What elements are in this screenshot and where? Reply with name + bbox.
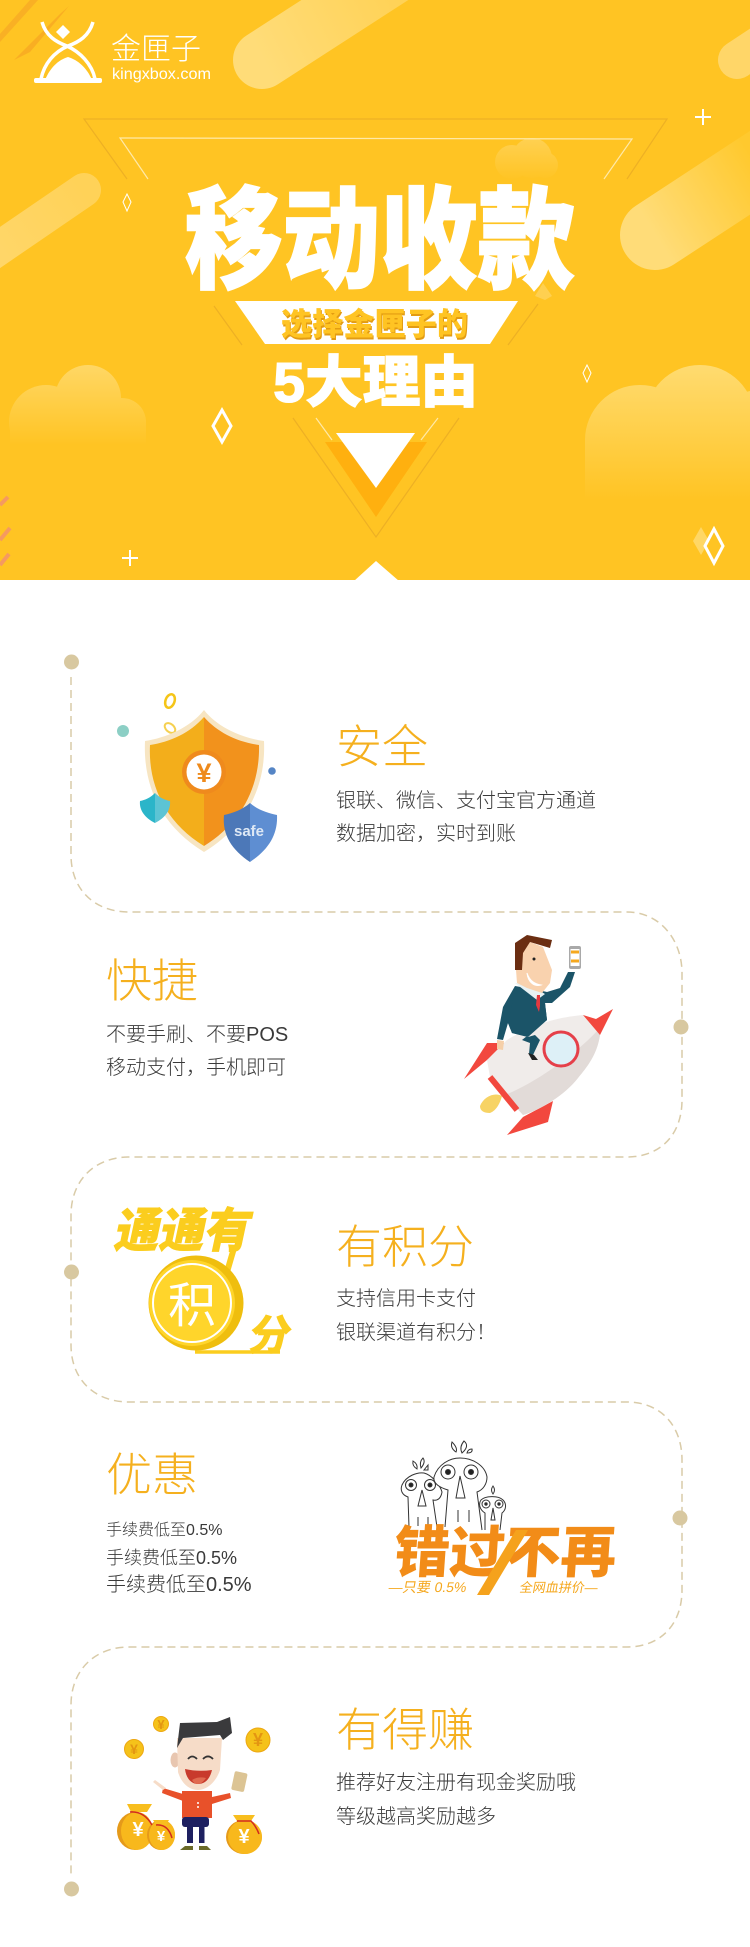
icon: surprised faces [401, 1441, 506, 1530]
icon: slogan lettering: —只要 0.5% [387, 1579, 468, 1595]
icon: happy man with money: ¥ [253, 1730, 263, 1750]
description: 银联渠道有积分！ [336, 1321, 496, 1344]
description [336, 1287, 496, 1344]
icon: happy man with money: ¥ [157, 1717, 165, 1732]
hero banner [0, 0, 750, 581]
notch [354, 561, 399, 581]
panel: discount [106, 1441, 619, 1596]
description [106, 1023, 288, 1079]
icon: logo figure [34, 22, 102, 83]
description: 不要手刷、不要POS [106, 1023, 288, 1046]
title: 移动收款 [185, 180, 575, 303]
subtitle: five reasons: 5大理由 [273, 352, 478, 414]
description [106, 1521, 252, 1596]
heading: 优惠 [106, 1449, 198, 1501]
icon: shield: ¥ [196, 758, 212, 788]
description: 手续费低至0.5% [106, 1521, 222, 1539]
description: 支持信用卡支付 [336, 1287, 476, 1310]
icon: man on rocket [464, 935, 613, 1135]
heading: 有积分 [336, 1221, 474, 1273]
icon: happy man with money: ¥ [132, 1819, 144, 1841]
triangle frame lines [84, 119, 667, 537]
clouds [9, 138, 750, 500]
icon: happy man with money [117, 1716, 270, 1854]
icon: happy man with money: ¥ [157, 1828, 166, 1845]
description: 手续费低至0.5% [106, 1548, 237, 1568]
icon: slogan lettering: 全网血拼价— [518, 1579, 600, 1595]
description: 等级越高奖励越多 [336, 1805, 496, 1828]
subtitle ribbon [235, 301, 518, 344]
subtitle ribbon: 选择金匣子的 [281, 307, 468, 342]
icon: happy man with money: ¥ [130, 1741, 138, 1757]
icon: points coin: 积 [168, 1280, 216, 1333]
description [336, 1771, 576, 1828]
description: 手续费低至0.5% [106, 1573, 252, 1596]
heading: 快捷 [106, 955, 198, 1007]
heading: 有得赚 [336, 1704, 474, 1756]
description: 移动支付，手机即可 [106, 1056, 286, 1079]
icon: points coin: 通通有 [111, 1205, 257, 1258]
description: 推荐好友注册有现金奖励哦 [336, 1771, 576, 1794]
website: kingxbox.com [112, 66, 211, 83]
icon: shield: safe [234, 823, 264, 840]
panel: security [117, 693, 596, 862]
diamonds and sparkles [122, 109, 723, 566]
dashed timeline [64, 654, 688, 1896]
description: 数据加密，实时到账 [336, 822, 516, 845]
icon: points coin [111, 1205, 296, 1359]
arrow: down triangle [325, 433, 427, 517]
panel: points [111, 1205, 496, 1359]
description [336, 789, 596, 845]
icon: points coin: 分 [245, 1312, 296, 1359]
panel: earn [117, 1704, 576, 1854]
icon: slogan lettering: 错过不再 [392, 1521, 619, 1584]
subtitle ribbon: 选择金匣子的 [282, 309, 469, 344]
icon: happy man with money: ¥ [238, 1826, 250, 1848]
logo [34, 22, 211, 83]
icon: shield [117, 693, 277, 862]
panel: fast [106, 935, 613, 1135]
description: 银联、微信、支付宝官方通道 [336, 789, 596, 812]
brand name: 金匣子 [111, 33, 201, 66]
heading: 安全 [336, 721, 428, 773]
